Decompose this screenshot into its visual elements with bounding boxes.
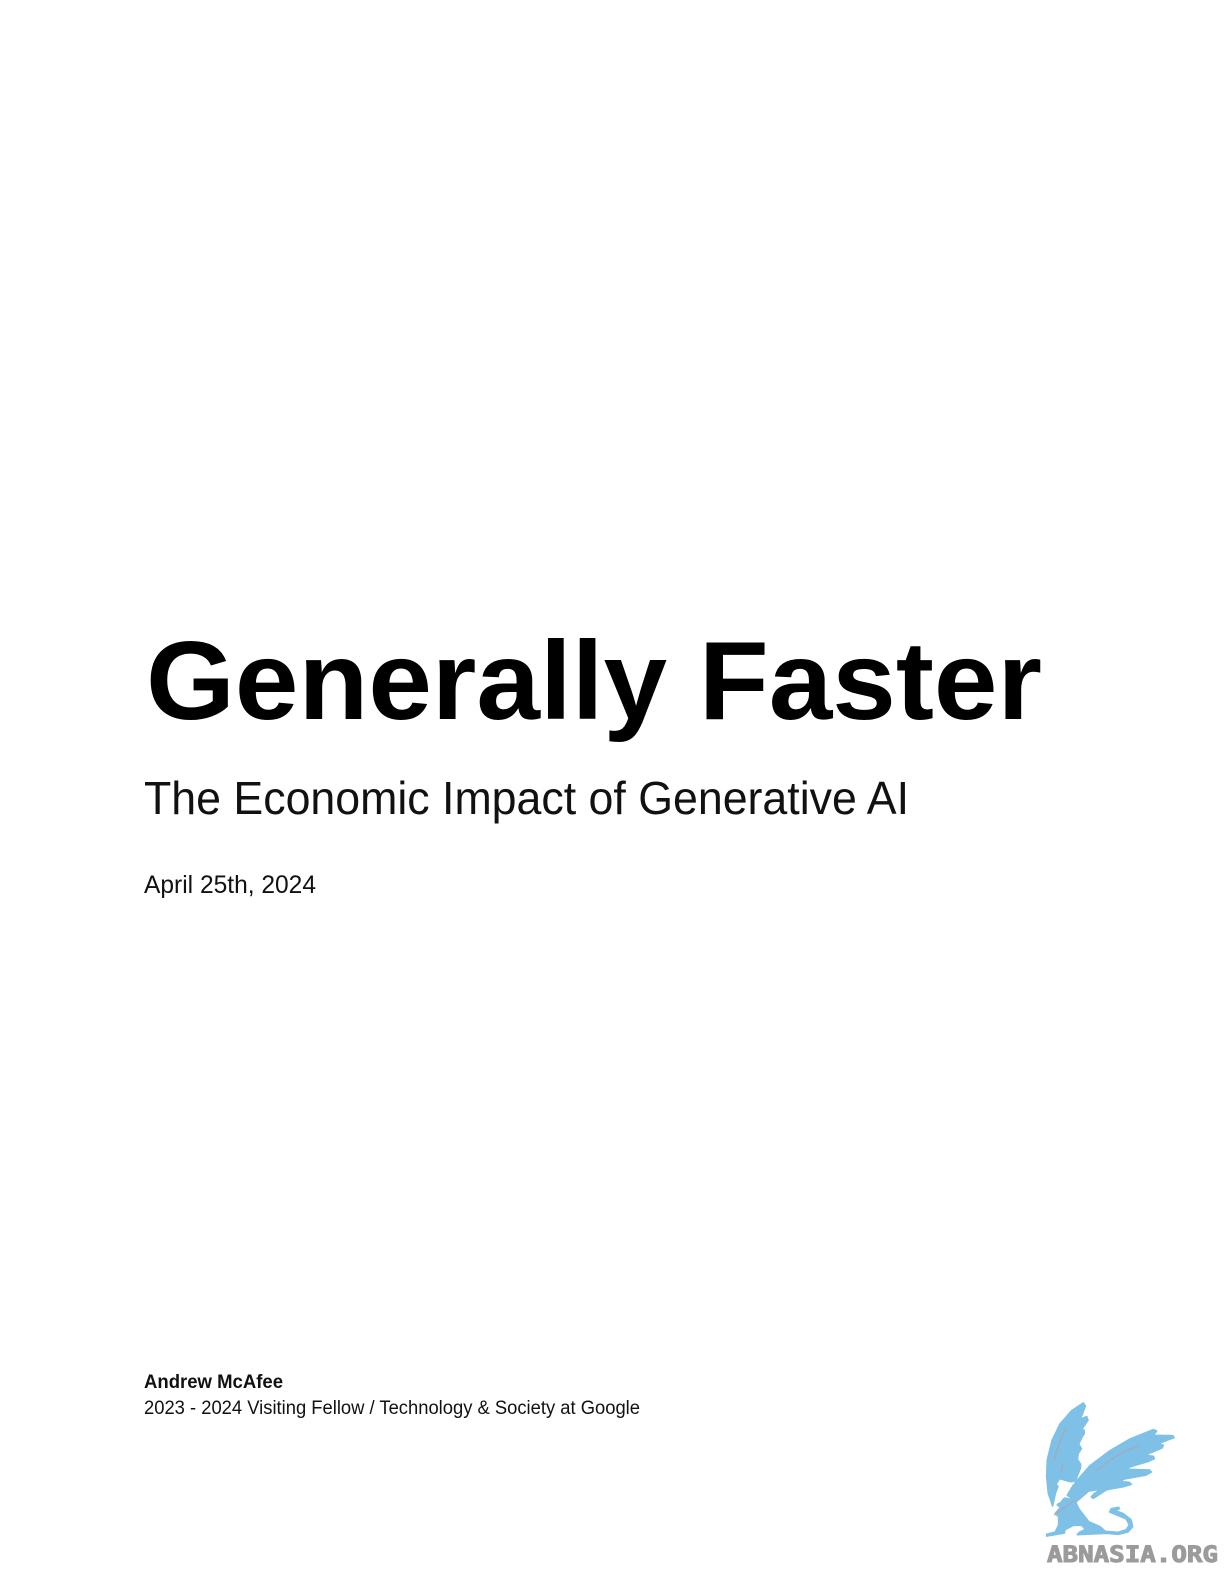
date: April 25th, 2024 — [144, 871, 316, 899]
title: Generally Faster — [146, 619, 1042, 743]
griffin head — [1056, 1480, 1075, 1504]
wordmark: ABNASIA.ORG — [1047, 1543, 1218, 1568]
author affiliation: 2023 - 2024 Visiting Fellow / Technology & Society at Google — [144, 1398, 640, 1419]
author name: Andrew McAfee — [144, 1372, 283, 1393]
author block — [144, 1372, 640, 1419]
subtitle: The Economic Impact of Generative AI — [144, 772, 909, 824]
griffin — [1047, 1403, 1174, 1536]
logo: griffin with wordmark — [1047, 1403, 1218, 1568]
griffin feather accents — [1054, 1429, 1139, 1515]
